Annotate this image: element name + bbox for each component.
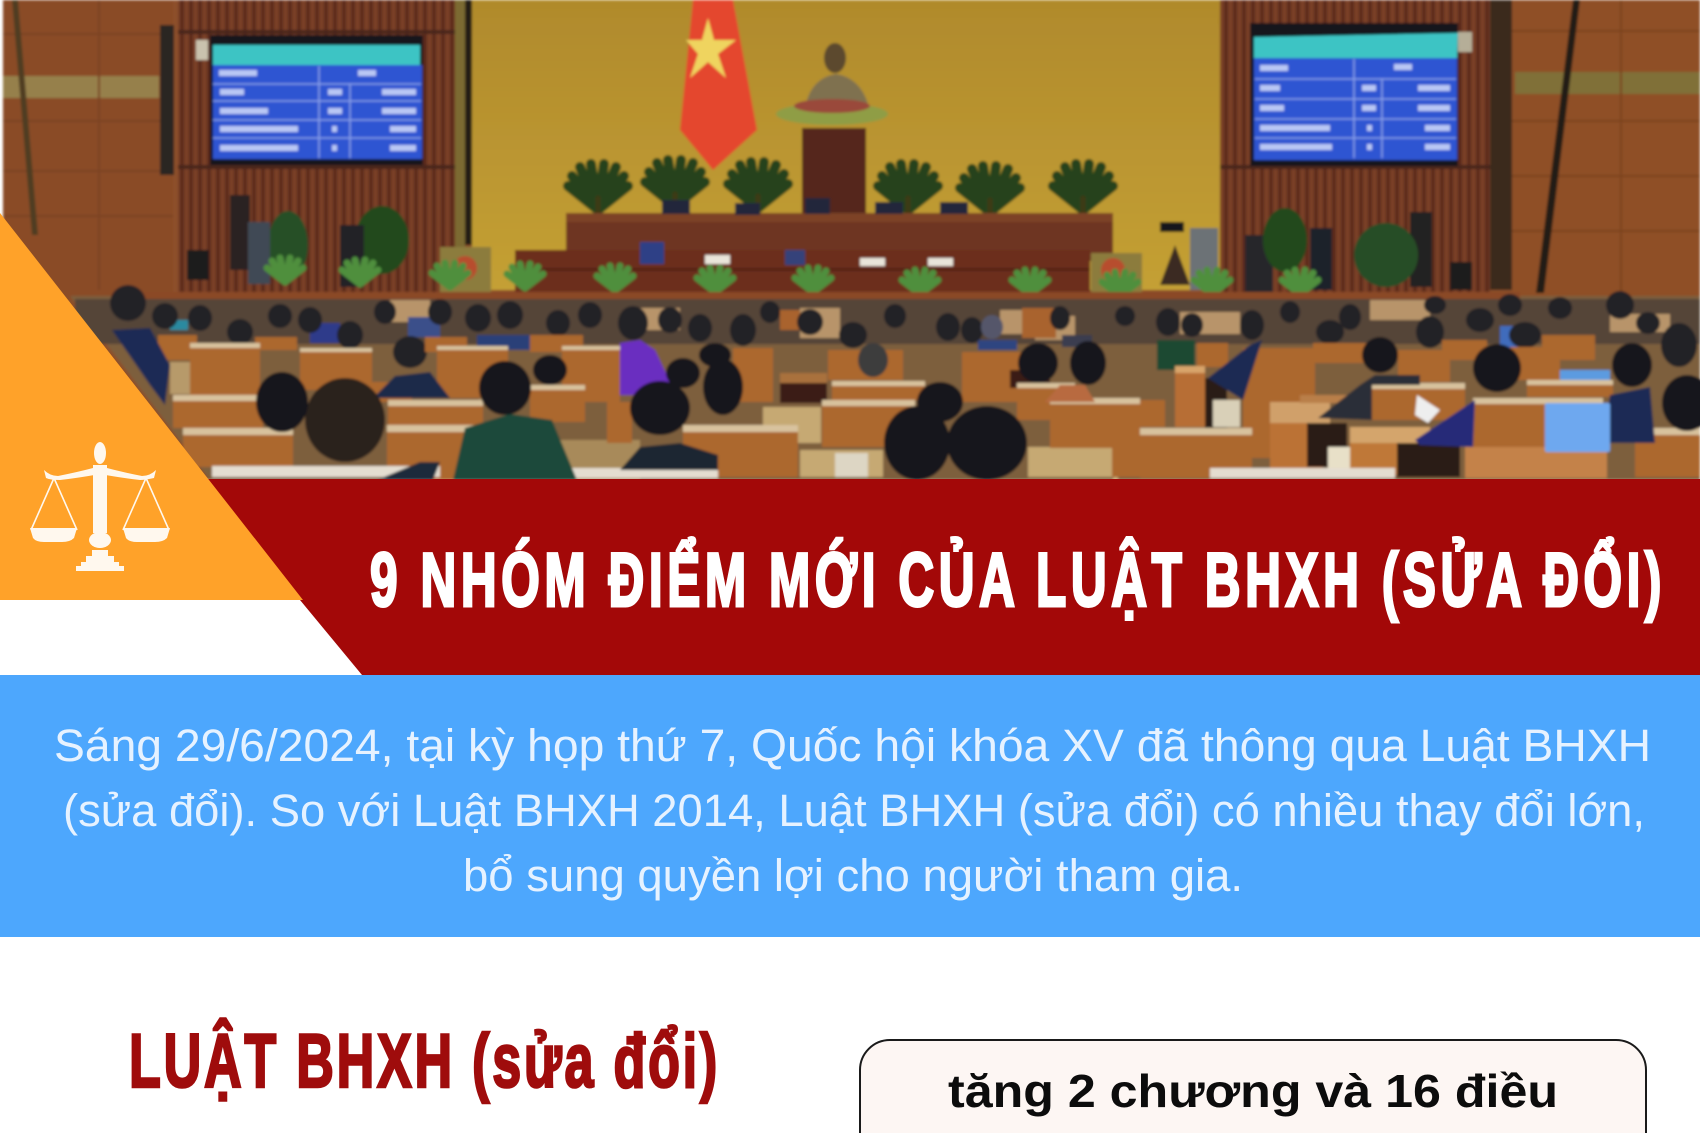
left slatted panel	[178, 0, 472, 292]
left voting screen	[196, 35, 423, 165]
delegates seen from behind	[112, 328, 1655, 480]
presidium dais	[515, 198, 1113, 300]
right voting screen	[1250, 23, 1472, 166]
intro text: (sửa đổi). So với Luật BHXH 2014, Luật BHXH (sửa đổi) có nhiều thay đổi lớn,	[63, 785, 1645, 836]
panel: blue intro band	[0, 675, 1700, 937]
small plants along the floor	[267, 258, 1318, 296]
row of plants on the dais	[568, 160, 1113, 220]
callout: change summary card	[860, 1040, 1646, 1133]
national flag	[680, 0, 757, 170]
panel: National Assembly hall photo	[3, 0, 1700, 480]
distant crowd	[110, 285, 1697, 368]
audience floor	[70, 296, 1700, 480]
icon: scales of justice	[30, 442, 170, 571]
delegates' heads	[256, 337, 1700, 480]
bust and flower stand	[776, 43, 888, 216]
state emblems	[440, 247, 1142, 301]
right slatted panel	[1220, 0, 1512, 300]
seat top rails	[173, 343, 1700, 478]
desks	[780, 366, 1607, 478]
intro text	[54, 720, 1651, 901]
section heading: LUẬT BHXH (sửa đổi)	[129, 1018, 720, 1104]
intro text: bổ sung quyền lợi cho người tham gia.	[463, 850, 1243, 901]
wooden seats	[158, 335, 1700, 480]
panel: red title banner	[200, 479, 1700, 675]
far delegates' clothes	[170, 317, 1522, 370]
panel: orange triangle with scales	[0, 213, 303, 600]
beige desks and floor	[170, 362, 1118, 480]
intro text: Sáng 29/6/2024, tại kỳ họp thứ 7, Quốc hội khóa XV đã thông qua Luật BHXH	[54, 720, 1651, 771]
callout text: tăng 2 chương và 16 điều	[948, 1065, 1558, 1117]
far seats band	[75, 299, 1700, 344]
left wall	[3, 0, 174, 300]
camera crews and side plants	[248, 206, 1418, 297]
golden wall	[472, 0, 1220, 290]
wooden rail behind audience	[120, 292, 1520, 299]
right wall	[1512, 0, 1700, 300]
